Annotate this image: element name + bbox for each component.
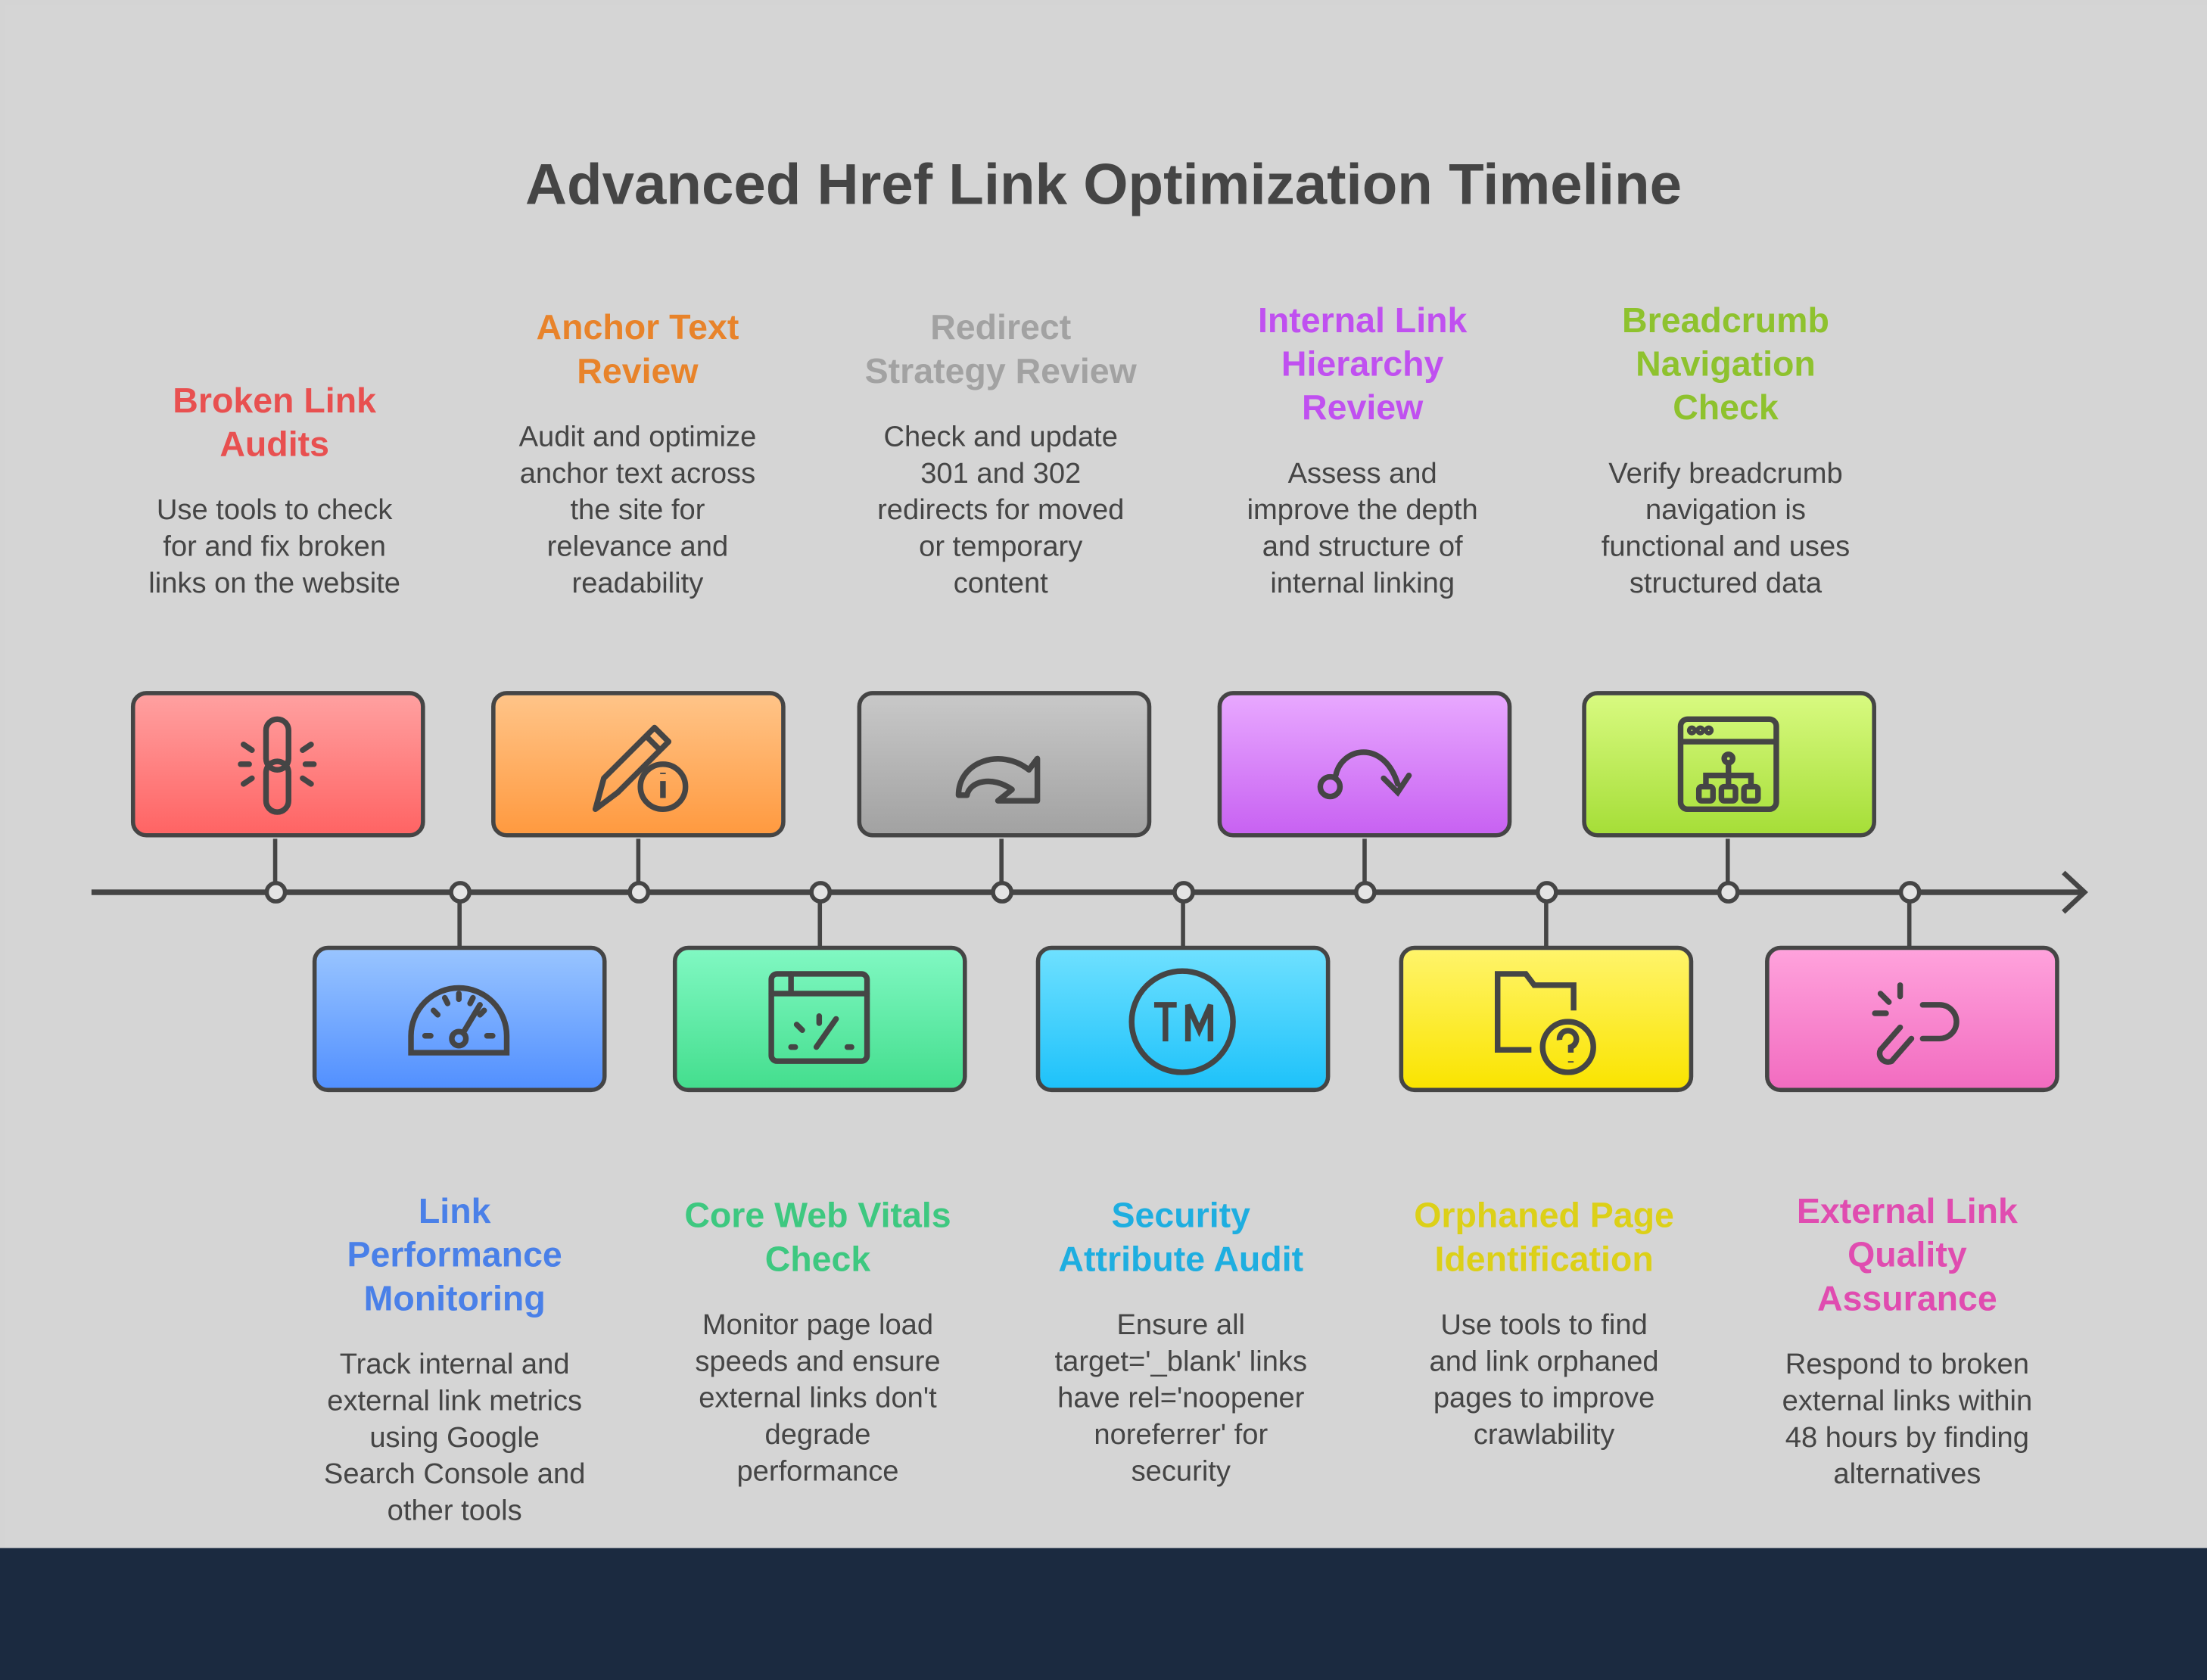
text: security attribute audit: noreferrer' for bbox=[1094, 1419, 1268, 1451]
box: internal link hierarchy bbox=[1218, 691, 1511, 838]
text: link performance monitoring bbox=[324, 1192, 585, 1527]
text: redirect strategy review: Redirect bbox=[930, 308, 1071, 347]
text: external link quality assurance: Quality bbox=[1847, 1236, 1967, 1275]
text: broken link audits bbox=[148, 381, 400, 599]
text: internal link hierarchy review bbox=[1247, 301, 1478, 599]
text: redirect strategy review: redirects for moved bbox=[877, 494, 1124, 527]
text: link performance monitoring: external link metrics bbox=[327, 1385, 582, 1417]
text: orphaned page identification: pages to improve bbox=[1433, 1382, 1654, 1414]
text: anchor text review: anchor text across bbox=[520, 457, 755, 490]
text: breadcrumb navigation check: Check bbox=[1673, 388, 1779, 428]
box: security attribute audit bbox=[1036, 946, 1330, 1092]
text: orphaned page identification: and link orphaned bbox=[1430, 1346, 1659, 1378]
text: external link quality assurance: external links within bbox=[1782, 1385, 2032, 1417]
box: redirect strategy review bbox=[858, 691, 1151, 838]
text: anchor text review bbox=[519, 308, 756, 599]
text: internal link hierarchy review: Review bbox=[1302, 388, 1423, 428]
box: broken link audits bbox=[131, 691, 425, 838]
text: orphaned page identification bbox=[1414, 1196, 1674, 1451]
text: orphaned page identification: crawlability bbox=[1474, 1419, 1614, 1451]
text: breadcrumb navigation check bbox=[1602, 301, 1850, 599]
box: orphaned page identification bbox=[1399, 946, 1693, 1092]
text: broken link audits: Use tools to check bbox=[157, 494, 392, 527]
text: redirect strategy review: Check and update bbox=[884, 421, 1118, 453]
text: redirect strategy review bbox=[865, 308, 1137, 599]
text: breadcrumb navigation check: navigation is bbox=[1645, 494, 1806, 527]
text: link performance monitoring: Link bbox=[419, 1192, 490, 1231]
text: core web vitals check: degrade bbox=[765, 1419, 870, 1451]
text: link performance monitoring: Track internal and bbox=[340, 1349, 570, 1380]
text: redirect strategy review: or temporary bbox=[919, 530, 1082, 563]
text: security attribute audit: have rel='noopener bbox=[1057, 1382, 1304, 1414]
box: link performance monitoring bbox=[313, 946, 607, 1092]
text: internal link hierarchy review: improve the depth bbox=[1247, 494, 1478, 527]
text: anchor text review: the site for bbox=[570, 494, 705, 527]
text: anchor text review: Review bbox=[577, 352, 699, 391]
text: core web vitals check bbox=[684, 1196, 951, 1488]
text: security attribute audit bbox=[1055, 1196, 1307, 1488]
text: security attribute audit: Ensure all bbox=[1116, 1309, 1245, 1341]
text: link performance monitoring: Search Console and bbox=[324, 1458, 585, 1490]
text: broken link audits: links on the website bbox=[148, 567, 400, 599]
text: link performance monitoring: Monitoring bbox=[364, 1279, 546, 1319]
text: redirect strategy review: content bbox=[954, 567, 1048, 599]
text: internal link hierarchy review: Internal Link bbox=[1258, 301, 1467, 341]
text: orphaned page identification: Identification bbox=[1434, 1240, 1654, 1279]
text: core web vitals check: speeds and ensure bbox=[695, 1346, 941, 1378]
text: anchor text review: Anchor Text bbox=[537, 308, 739, 347]
text: orphaned page identification: Use tools to find bbox=[1440, 1309, 1648, 1341]
text: core web vitals check: Core Web Vitals bbox=[684, 1196, 951, 1236]
text: broken link audits: for and fix broken bbox=[163, 530, 386, 563]
text: link performance monitoring: Performance bbox=[347, 1236, 562, 1275]
text: security attribute audit: target='_blank' links bbox=[1055, 1346, 1307, 1378]
text: breadcrumb navigation check: Breadcrumb bbox=[1622, 301, 1829, 341]
text: link performance monitoring: other tools bbox=[388, 1495, 522, 1527]
text: breadcrumb navigation check: structured data bbox=[1630, 567, 1822, 599]
text: core web vitals check: Check bbox=[765, 1240, 870, 1279]
text: external link quality assurance: Respond to broken bbox=[1785, 1349, 2029, 1380]
text: internal link hierarchy review: and structure of bbox=[1262, 530, 1463, 563]
text: external link quality assurance: External Link bbox=[1797, 1192, 2018, 1231]
text: orphaned page identification: Orphaned Page bbox=[1414, 1196, 1674, 1236]
text: broken link audits: Audits bbox=[219, 425, 329, 465]
box: core web vitals bbox=[673, 946, 967, 1092]
timeline axis bbox=[91, 870, 2088, 914]
text: anchor text review: Audit and optimize bbox=[519, 421, 756, 453]
text: redirect strategy review: 301 and 302 bbox=[920, 457, 1081, 490]
text: security attribute audit: Attribute Audit bbox=[1058, 1240, 1303, 1279]
text: link performance monitoring: using Google bbox=[369, 1421, 540, 1454]
text: core web vitals check: performance bbox=[736, 1455, 899, 1488]
text: core web vitals check: external links don't bbox=[699, 1382, 937, 1414]
text: breadcrumb navigation check: Verify breadcrumb bbox=[1608, 457, 1843, 490]
text: internal link hierarchy review: Assess and bbox=[1288, 457, 1437, 490]
text: core web vitals check: Monitor page load bbox=[702, 1309, 933, 1341]
text: external link quality assurance bbox=[1782, 1192, 2032, 1490]
text: broken link audits: Broken Link bbox=[173, 381, 376, 421]
title: Advanced Href Link Optimization Timeline bbox=[525, 152, 1682, 216]
text: security attribute audit: security bbox=[1132, 1455, 1231, 1488]
text: breadcrumb navigation check: Navigation bbox=[1636, 345, 1816, 384]
text: anchor text review: relevance and bbox=[547, 530, 728, 563]
text: anchor text review: readability bbox=[572, 567, 703, 599]
box: anchor text review bbox=[491, 691, 786, 838]
text: redirect strategy review: Strategy Review bbox=[865, 352, 1137, 391]
box: external link quality bbox=[1765, 946, 2059, 1092]
text: breadcrumb navigation check: functional and uses bbox=[1602, 530, 1850, 563]
text: external link quality assurance: 48 hours by finding bbox=[1785, 1421, 2029, 1454]
text: external link quality assurance: alternatives bbox=[1833, 1458, 1981, 1490]
text: internal link hierarchy review: Hierarchy bbox=[1281, 345, 1443, 384]
box: breadcrumb navigation bbox=[1582, 691, 1876, 838]
text: security attribute audit: Security bbox=[1112, 1196, 1250, 1236]
text: external link quality assurance: Assurance bbox=[1817, 1279, 1997, 1319]
text: internal link hierarchy review: internal linking bbox=[1270, 567, 1455, 599]
